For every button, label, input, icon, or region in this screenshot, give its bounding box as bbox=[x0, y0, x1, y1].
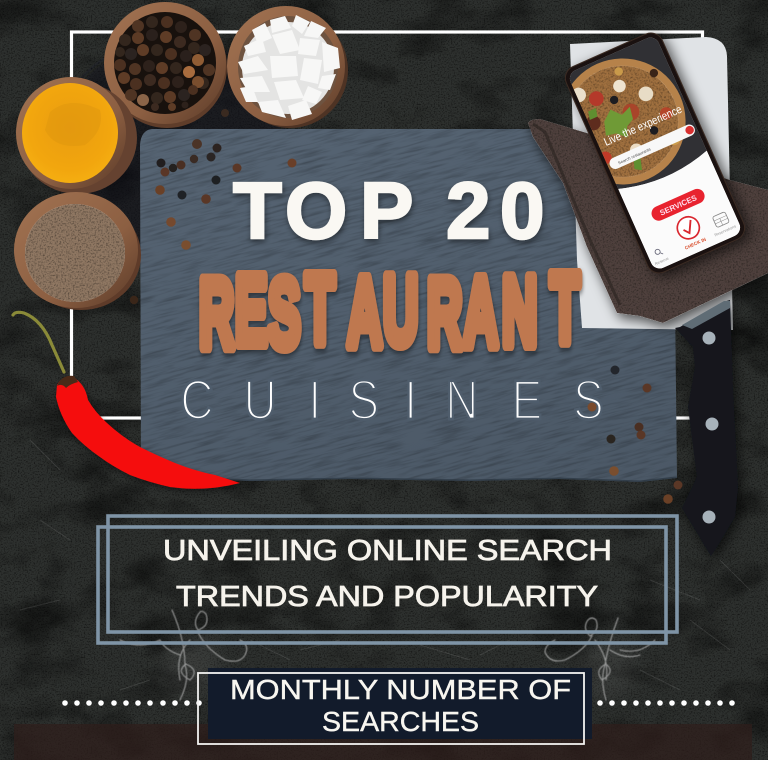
subtitle text: UNVEILING ONLINE SEARCH bbox=[163, 535, 612, 567]
shadow around bowls bbox=[55, 40, 285, 260]
smartphone bbox=[565, 30, 754, 282]
smoke wisps bbox=[120, 610, 655, 700]
white frame bbox=[72, 32, 702, 418]
chili body bbox=[56, 377, 240, 489]
knife handle bbox=[675, 300, 738, 556]
subtitle frames bbox=[98, 516, 677, 643]
check in icon: CHECK IN bbox=[684, 237, 708, 252]
subtitle text bbox=[163, 535, 612, 613]
dotted line left bbox=[62, 700, 202, 706]
scattered peppercorns on board bbox=[130, 109, 683, 504]
panel: monthly number of searches bbox=[198, 668, 592, 744]
search bar bbox=[610, 124, 695, 169]
search bar: Search restaurants bbox=[617, 146, 651, 165]
label text bbox=[230, 674, 571, 737]
bowl: white salt bbox=[227, 6, 348, 128]
title line: RESTAURANT: RESTAURANT bbox=[199, 255, 580, 369]
phone screen bbox=[570, 38, 740, 268]
brown napkin bbox=[528, 119, 768, 323]
bowl: turmeric bbox=[16, 77, 137, 194]
reserve search icon bbox=[654, 248, 669, 266]
label text: SEARCHES bbox=[322, 706, 479, 737]
check in icon bbox=[676, 216, 706, 250]
chili cap bbox=[57, 376, 78, 388]
reservations table icon bbox=[712, 212, 736, 236]
pizza bbox=[572, 58, 686, 184]
title line: TOP 20: TOP 20 bbox=[233, 166, 544, 255]
reserve search icon: Reserve bbox=[654, 255, 670, 266]
slate board bbox=[140, 129, 677, 482]
subtitle text: TRENDS AND POPULARITY bbox=[176, 581, 598, 613]
services button bbox=[652, 188, 705, 221]
services button: SERVICES bbox=[658, 193, 698, 218]
red chili pepper bbox=[13, 312, 240, 489]
title line: CUISINES: CUISINES bbox=[180, 369, 604, 431]
peppercorn over title bbox=[588, 402, 596, 412]
label text: MONTHLY NUMBER OF bbox=[230, 674, 571, 705]
bowl: ground spice bbox=[14, 192, 141, 310]
white cleaver blade bbox=[570, 37, 733, 330]
right smoke bbox=[545, 618, 655, 700]
left smoke bbox=[120, 610, 247, 700]
reservations table icon: Reservations bbox=[714, 223, 737, 237]
knife rivets bbox=[702, 332, 718, 524]
chili stem bbox=[13, 312, 64, 372]
bowl: black peppercorns bbox=[104, 2, 227, 128]
dotted line right bbox=[597, 700, 735, 706]
live the experience: Live the experience bbox=[602, 104, 684, 149]
